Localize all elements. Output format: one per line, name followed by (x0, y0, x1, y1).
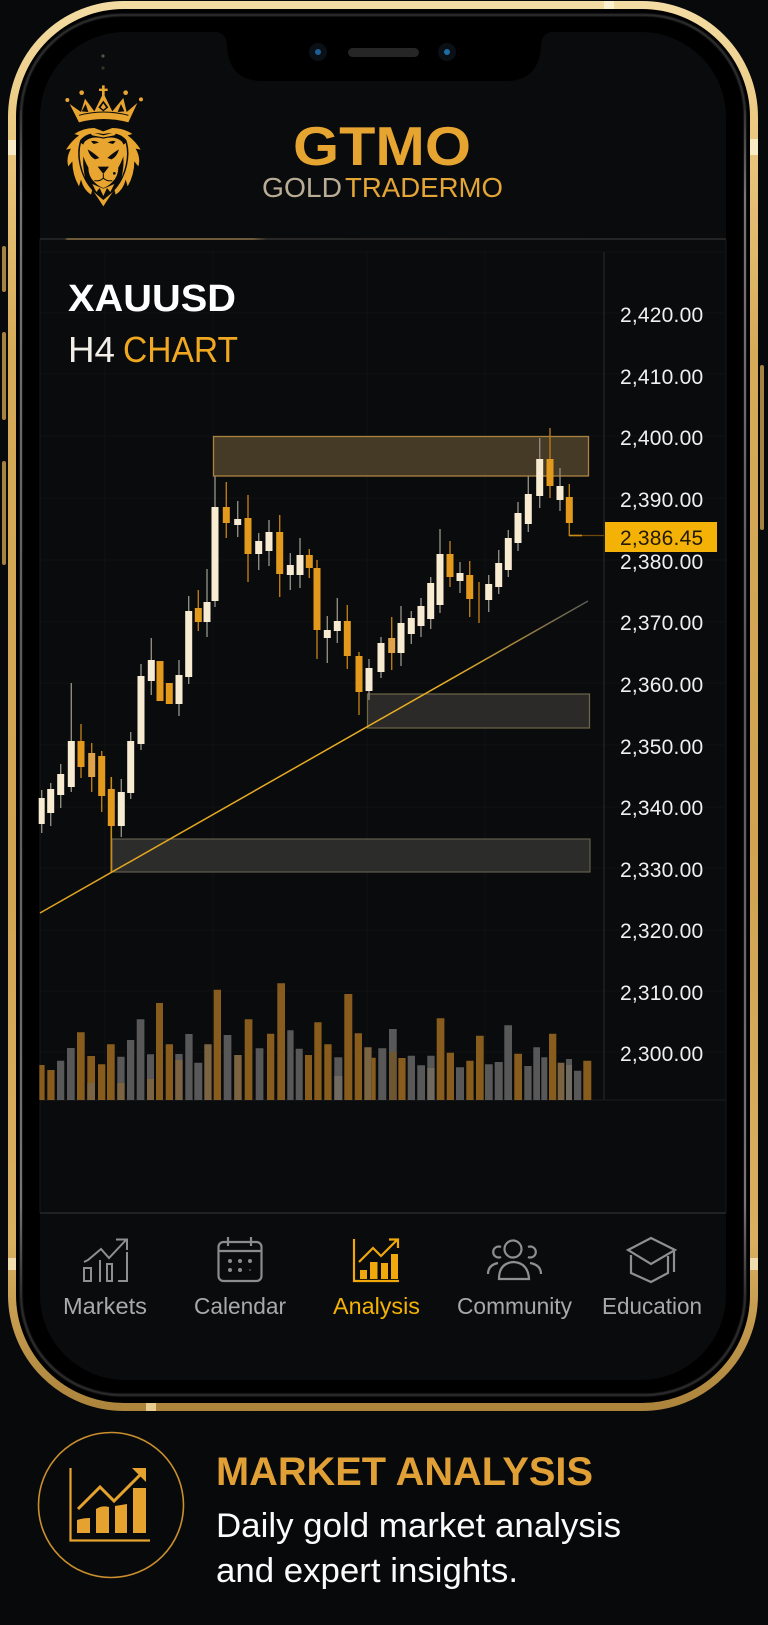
support zone lower (112, 839, 590, 872)
current price tag: 2,386.45 (620, 527, 703, 550)
chart subtitle: CHART: CHART (123, 329, 238, 370)
phone screen (40, 32, 726, 1380)
notch (217, 32, 551, 81)
chart title: XAUUSD: XAUUSD (68, 278, 236, 320)
feature description: and expert insights. (216, 1552, 518, 1590)
nav item: Community (457, 1240, 572, 1319)
price axis labels: 2,380.00 (620, 551, 703, 574)
status dots (101, 54, 105, 70)
price axis labels (620, 304, 703, 1066)
nav item: Calendar: Calendar (194, 1293, 286, 1319)
support zone middle (368, 694, 590, 728)
phone side buttons (2, 246, 764, 565)
price axis labels: 2,400.00 (620, 427, 703, 450)
price axis labels: 2,300.00 (620, 1043, 703, 1066)
resistance zone (214, 436, 588, 476)
icon: lion head (66, 128, 141, 206)
price axis labels: 2,320.00 (620, 920, 703, 943)
subtitle: GOLD: GOLD (262, 172, 342, 203)
trend line (40, 601, 588, 913)
price axis labels: 2,340.00 (620, 797, 703, 820)
price axis labels: 2,370.00 (620, 612, 703, 635)
icon: graduation cap (628, 1238, 675, 1282)
icon: analysis (354, 1239, 399, 1281)
nav item: Education (602, 1238, 702, 1319)
price axis labels: 2,310.00 (620, 982, 703, 1005)
feature description: Daily gold market analysis (216, 1507, 621, 1545)
icon: crown (65, 85, 143, 206)
nav item: Analysis active: Analysis (333, 1293, 420, 1319)
title: GTMO (293, 115, 471, 177)
price axis labels: 2,350.00 (620, 736, 703, 759)
nav item: Education: Education (602, 1293, 702, 1319)
candlesticks (39, 428, 604, 872)
price axis labels: 2,330.00 (620, 859, 703, 882)
icon: markets (84, 1240, 127, 1282)
nav item: Markets: Markets (63, 1293, 147, 1319)
volume bars (39, 983, 591, 1100)
price axis labels: 2,410.00 (620, 366, 703, 389)
feature description (216, 1507, 621, 1590)
feature icon: chart in circle (38, 1432, 184, 1578)
nav item: Community: Community (457, 1293, 572, 1319)
nav item: Analysis active (333, 1239, 420, 1319)
chart frame and grid (40, 239, 726, 1213)
nav item: Markets (63, 1240, 147, 1319)
price axis labels: 2,360.00 (620, 674, 703, 697)
logo: crowned lion (65, 85, 143, 206)
feature heading: MARKET ANALYSIS (216, 1450, 593, 1494)
subtitle: TRADERMO: TRADERMO (345, 172, 503, 203)
price axis labels: 2,390.00 (620, 489, 703, 512)
nav item: Calendar (194, 1237, 286, 1319)
icon: calendar (218, 1237, 262, 1281)
chart subtitle: H4: H4 (68, 329, 115, 370)
price axis labels: 2,420.00 (620, 304, 703, 327)
icon: community (488, 1240, 541, 1279)
current price tag (605, 522, 717, 552)
